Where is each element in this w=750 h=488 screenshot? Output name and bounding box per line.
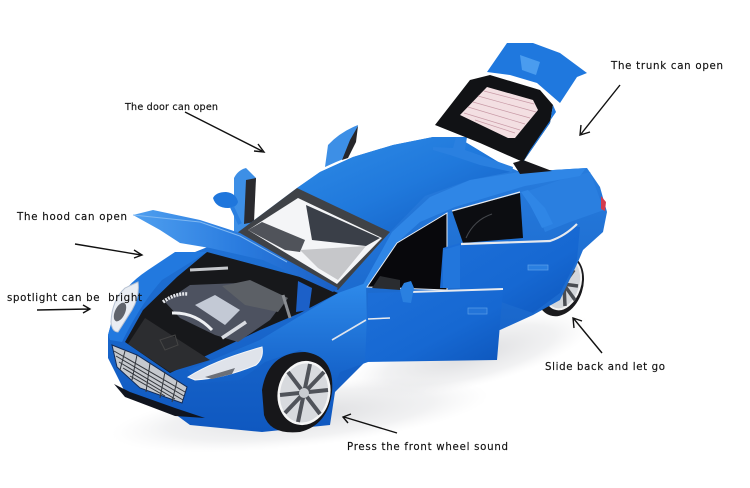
grille [112, 345, 187, 403]
rear window frame [435, 75, 553, 162]
front wheel [262, 352, 335, 432]
rear wheel [528, 247, 592, 323]
arrow: hood [75, 244, 142, 258]
fender and front bodywork [188, 283, 368, 388]
rear door, open [440, 224, 580, 313]
rear door opening [452, 190, 553, 243]
arrow: front wheel [343, 414, 397, 433]
rear window glass [460, 87, 538, 138]
engine bay [125, 252, 338, 373]
engine [165, 283, 285, 342]
label: hood: The hood can open [16, 212, 127, 223]
car body [108, 137, 607, 432]
open hood [133, 210, 338, 292]
label: spotlight: spotlight can be bright [7, 293, 142, 304]
left headlight [111, 282, 138, 332]
label: front wheel: Press the front wheel sound [347, 442, 508, 453]
left fender [108, 252, 207, 342]
lower bumper [114, 384, 205, 418]
arrow: spotlight [37, 305, 90, 313]
rear quarter highlight [525, 172, 604, 232]
trunk lid, open [433, 43, 587, 172]
front headlight [188, 347, 262, 380]
arrow: trunk [580, 85, 620, 135]
label: door: The door can open [124, 102, 218, 113]
front door opening [367, 213, 447, 290]
near side mirror [213, 192, 240, 224]
trunk spoiler panel [487, 43, 587, 103]
ground shadow [108, 294, 599, 467]
far side doors [234, 125, 358, 236]
door mirror [400, 281, 414, 303]
arrow: door [185, 112, 264, 152]
front door, open [365, 281, 503, 362]
arrow: slide back [573, 318, 602, 353]
trunk opening [513, 160, 552, 174]
roof panel [297, 137, 510, 232]
label: trunk: The trunk can open [610, 61, 723, 72]
windshield [237, 188, 390, 290]
label: slide back: Slide back and let go [545, 362, 665, 373]
rear lamp [601, 196, 606, 211]
trunk hinges [433, 137, 513, 172]
